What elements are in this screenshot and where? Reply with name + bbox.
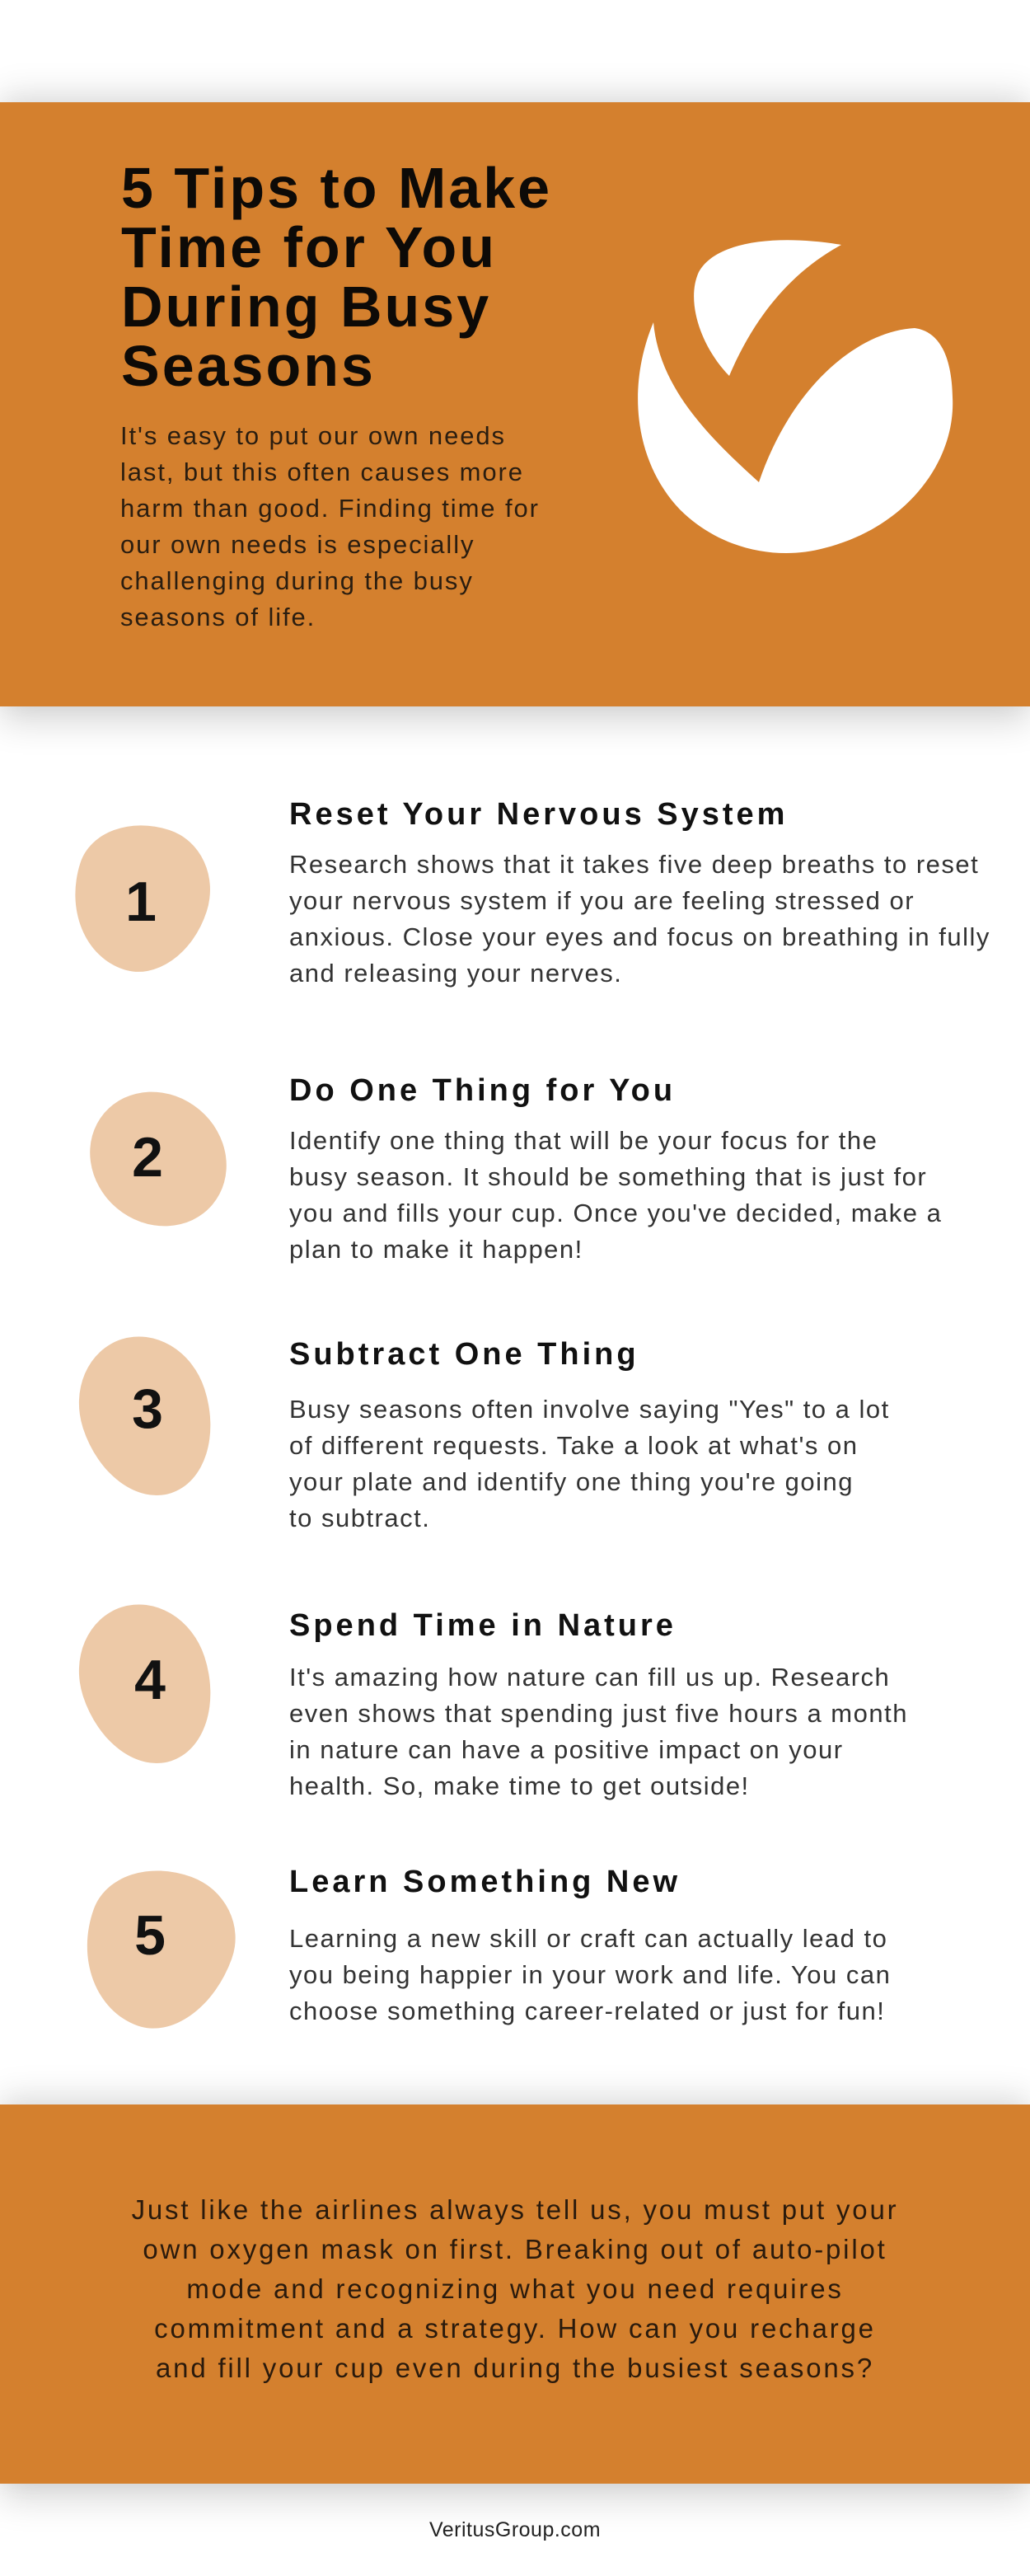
blob 1 <box>54 807 227 988</box>
body 4 <box>289 1663 908 1800</box>
title: During Busy <box>121 274 491 339</box>
body 3: Busy seasons often involve saying "Yes" to a lot <box>289 1395 890 1424</box>
intro text <box>120 421 540 631</box>
body 5: Learning a new skill or craft can actually lead to <box>289 1924 887 1953</box>
body 3: your plate and identify one thing you're going <box>289 1467 854 1496</box>
intro text: harm than good. Finding time for <box>120 494 540 523</box>
body 2: plan to make it happen! <box>289 1235 583 1264</box>
tip 3 <box>79 1337 211 1495</box>
body 4: in nature can have a positive impact on your <box>289 1735 844 1764</box>
tip 2 <box>90 1091 227 1227</box>
body 1 <box>289 850 990 988</box>
body 5: you being happier in your work and life. You can <box>289 1960 891 1989</box>
heading 3: Subtract One Thing <box>289 1337 639 1372</box>
intro text: last, but this often causes more <box>120 457 524 486</box>
header band <box>0 102 1030 706</box>
body 2: Identify one thing that will be your focus for the <box>289 1126 878 1155</box>
heading 1: Reset Your Nervous System <box>289 797 788 832</box>
closing text: and fill your cup even during the busiest seasons? <box>156 2353 874 2383</box>
closing text: Just like the airlines always tell us, you must put your <box>132 2194 898 2225</box>
body 1: and releasing your nerves. <box>289 959 622 988</box>
blob 5 <box>62 1849 253 2048</box>
tip 1 <box>75 825 210 972</box>
body 3: of different requests. Take a look at what's on <box>289 1431 859 1460</box>
body 3: to subtract. <box>289 1504 430 1532</box>
intro text: our own needs is especially <box>120 530 475 559</box>
body 2 <box>289 1126 942 1264</box>
number 4: 4 <box>134 1649 166 1711</box>
website url: VeritusGroup.com <box>429 2518 601 2541</box>
body 1: Research shows that it takes five deep breaths to reset <box>289 850 979 879</box>
number 1: 1 <box>125 870 157 933</box>
body 4: It's amazing how nature can fill us up. Research <box>289 1663 890 1692</box>
body 2: busy season. It should be something that is just for <box>289 1162 927 1191</box>
closing text: mode and recognizing what you need requires <box>186 2273 844 2304</box>
title: Seasons <box>121 334 376 398</box>
number 3: 3 <box>132 1377 163 1440</box>
closing text <box>132 2194 898 2383</box>
body 5 <box>289 1924 891 2025</box>
tip 4 <box>79 1604 211 1763</box>
title: Time for You <box>121 215 497 279</box>
heading 5: Learn Something New <box>289 1865 681 1899</box>
blob 4 <box>61 1588 232 1781</box>
heading 2: Do One Thing for You <box>289 1073 676 1108</box>
body 1: your nervous system if you are feeling stressed or <box>289 886 915 915</box>
blob 3 <box>61 1320 232 1513</box>
title: 5 Tips to Make <box>121 156 552 220</box>
body 1: anxious. Close your eyes and focus on breathing in fully <box>289 922 990 951</box>
body 4: even shows that spending just five hours a month <box>289 1699 908 1728</box>
tip 5 <box>87 1871 236 2029</box>
logo: checkmark egg <box>638 240 953 553</box>
body 5: choose something career-related or just for fun! <box>289 1997 885 2025</box>
intro text: challenging during the busy <box>120 566 474 595</box>
title <box>121 156 552 398</box>
body 2: you and fills your cup. Once you've decided, make a <box>289 1199 942 1227</box>
footer band <box>0 2104 1030 2484</box>
intro text: It's easy to put our own needs <box>120 421 506 450</box>
body 3 <box>289 1395 890 1532</box>
closing text: own oxygen mask on first. Breaking out of auto-pilot <box>143 2234 887 2264</box>
closing text: commitment and a strategy. How can you recharge <box>154 2313 876 2344</box>
number 5: 5 <box>134 1904 166 1967</box>
blob 2 <box>63 1064 254 1254</box>
intro text: seasons of life. <box>120 603 316 631</box>
body 4: health. So, make time to get outside! <box>289 1771 750 1800</box>
number 2: 2 <box>132 1126 163 1189</box>
heading 4: Spend Time in Nature <box>289 1608 677 1643</box>
